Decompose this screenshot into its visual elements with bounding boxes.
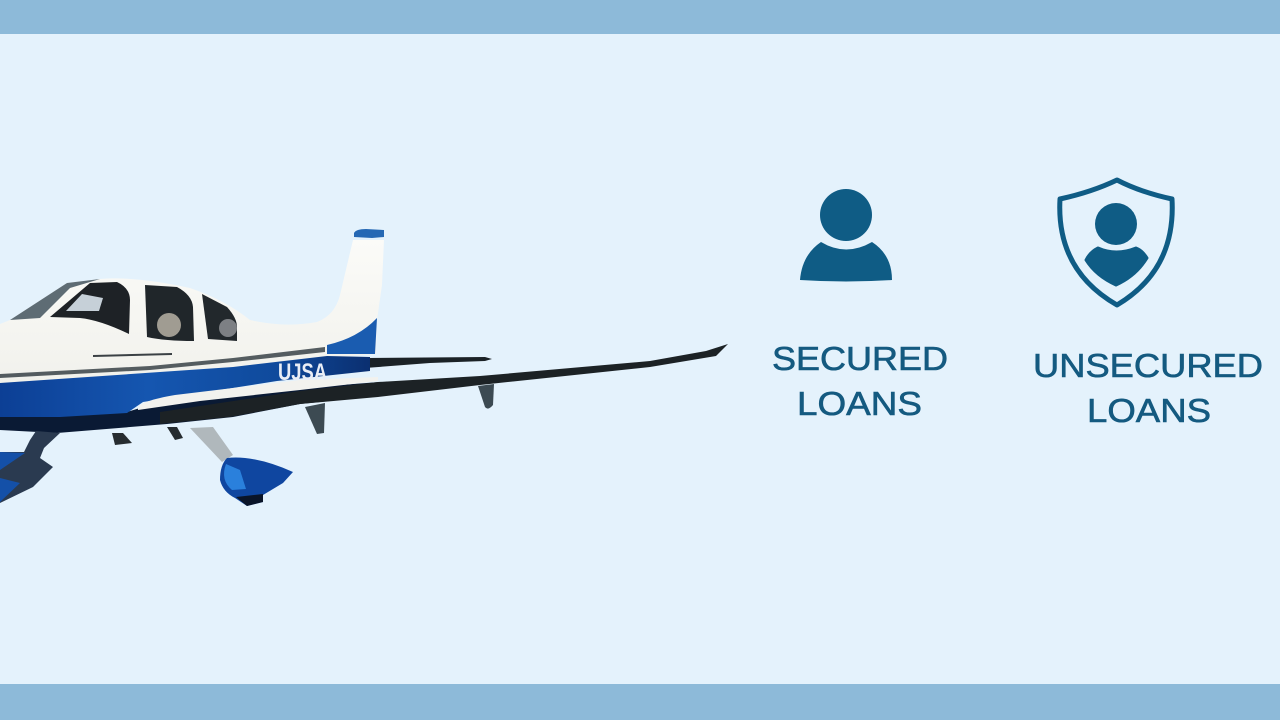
wing fins	[305, 403, 325, 434]
main wing	[160, 344, 728, 424]
label: unsecured loans	[1033, 347, 1263, 429]
canopy strip	[10, 279, 100, 320]
main wheel pants	[220, 458, 293, 506]
tail tip	[354, 229, 384, 238]
cheatline	[0, 347, 325, 378]
rear window	[202, 294, 237, 341]
label: unsecured loans: LOANS	[1087, 392, 1211, 429]
top band	[0, 0, 1280, 34]
wing root white fairing	[138, 377, 378, 410]
label: secured loans: SECURED	[772, 340, 948, 377]
unsecured loans item	[1033, 180, 1263, 429]
label: unsecured loans: UNSECURED	[1033, 347, 1263, 384]
small fairings	[112, 433, 132, 445]
registration: UJSA	[278, 359, 327, 386]
bottom band	[0, 684, 1280, 720]
tail blue stripe	[327, 318, 377, 354]
label: secured loans	[772, 340, 948, 422]
secured loans item	[772, 189, 948, 422]
label: secured loans: LOANS	[797, 385, 922, 422]
main gear strut	[190, 427, 233, 462]
windshield	[50, 282, 130, 334]
nose gear	[0, 431, 60, 503]
icon: shield with person	[1060, 180, 1172, 305]
airplane illustration	[0, 229, 728, 506]
side window	[145, 285, 194, 341]
horizontal tail	[365, 357, 492, 368]
fuselage blue stripe	[0, 356, 370, 417]
fuselage dark belly	[0, 382, 380, 433]
icon: person	[800, 189, 892, 282]
fuselage	[0, 240, 384, 386]
